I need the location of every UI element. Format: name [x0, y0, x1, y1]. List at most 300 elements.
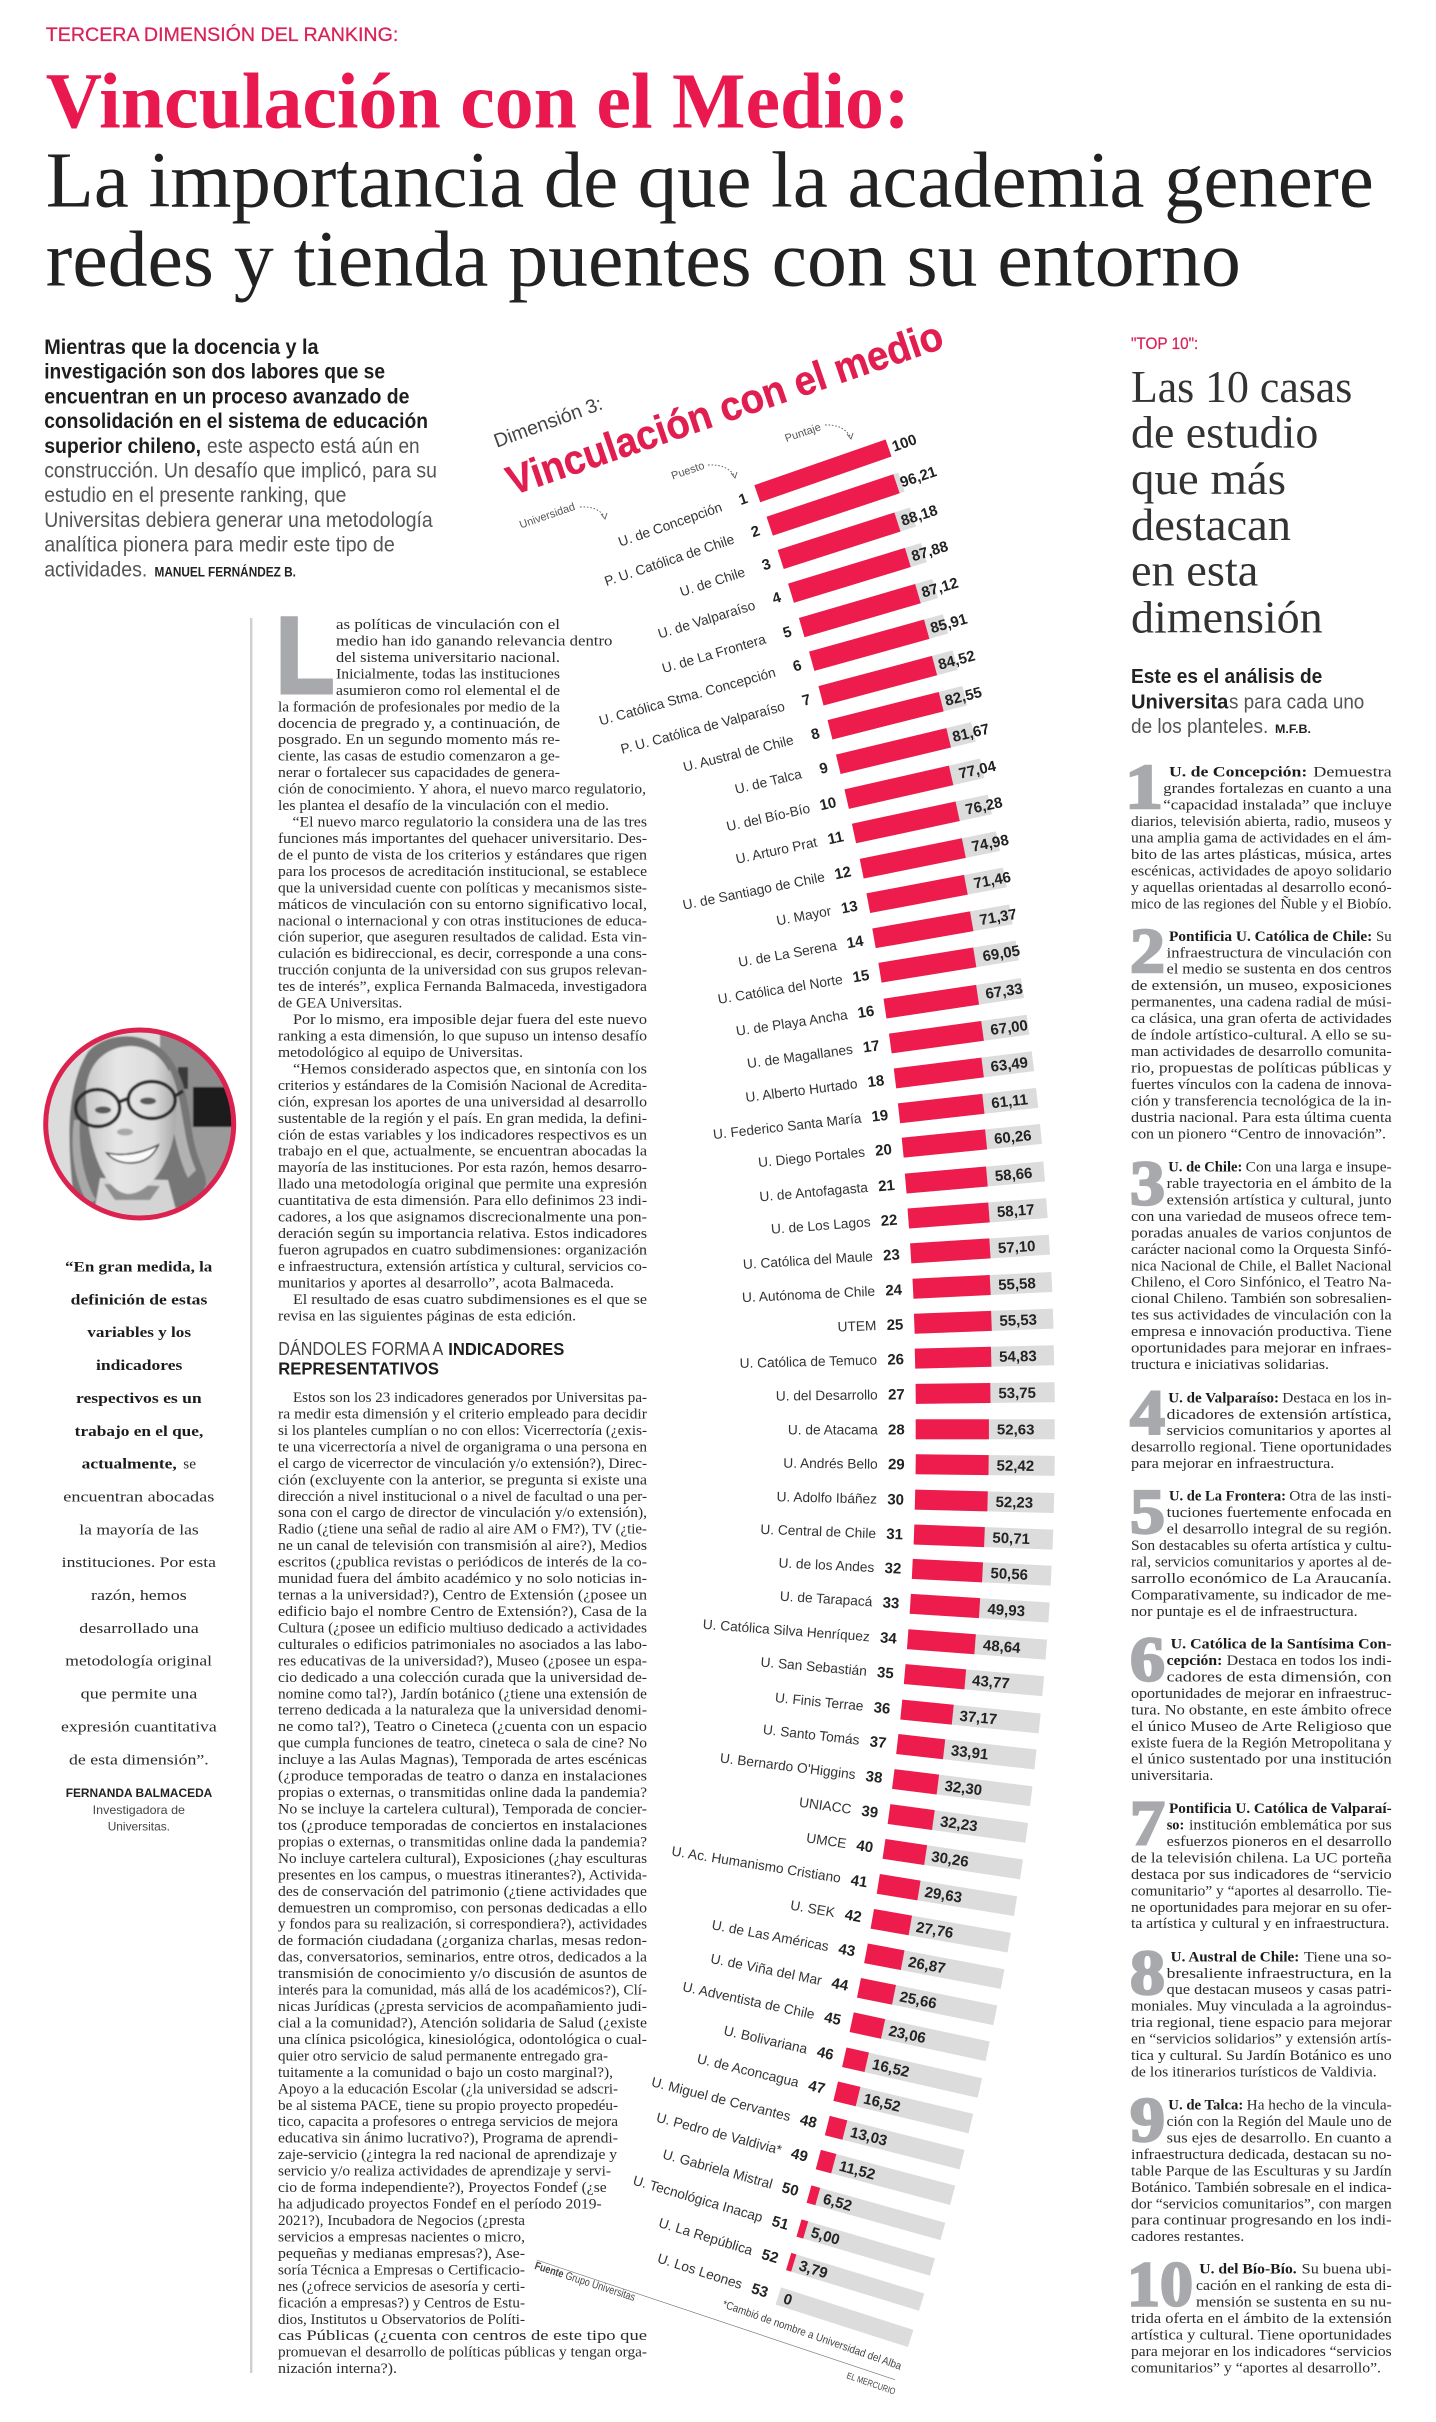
row 15: 69,05 [981, 942, 1021, 965]
row 33: U. de Tarapacá [779, 1589, 873, 1609]
top 10 item 2: ción y transferencia tecnológica de la in- [1131, 1093, 1392, 1109]
main article text, part 2: y fondos para su realización, si correspondiera?), actividades [278, 1917, 647, 1933]
quote attribution: Universitas. [108, 1820, 170, 1834]
main article text, part 2: No incluye cartelera cultural), Exposiciones (¿hay esculturas [278, 1851, 647, 1867]
top 10 item 9: cadores restantes. [1131, 2229, 1244, 2245]
row 40: 30,26 [930, 1848, 970, 1871]
row 10: 77,04 [957, 758, 998, 783]
row 26: U. Católica de Temuco [739, 1353, 878, 1371]
main article text, part 2: te una vicerrectoría a nivel de organigrama o una persona en [278, 1439, 648, 1455]
row 3: U. de Chile [678, 564, 747, 599]
row 51: U. Tecnológica Inacap [631, 2173, 765, 2225]
row 14: U. de La Serena [737, 938, 838, 970]
intro text block: investigación son dos labores que se [44, 361, 385, 384]
top 10 item 4: Destaca en los in- [1282, 1390, 1392, 1406]
top 10 item 8 [1130, 1937, 1392, 2080]
main article text, part 1: deración según su importancia relativa. Estos indicadores [278, 1226, 647, 1242]
row 53: U. Los Leones [656, 2251, 744, 2292]
top 10 item 9: U. de Talca: [1168, 2098, 1243, 2114]
subheading: indicadores representativos: INDICADORES [448, 1339, 564, 1359]
pull quote: variables y los [87, 1325, 191, 1341]
main article text, part 1: de el punto de vista de los criterios y estándares que rigen [278, 847, 648, 863]
top 10 item 6: el único sustentado por una institución [1131, 1752, 1392, 1768]
main article text, part 1: ción de conocimiento. Y ahora, el nuevo marco regulatorio, [278, 782, 646, 798]
main article text, part 2: ne como tal?), Teatro o Cineteca (¿cuenta con un espacio [278, 1719, 647, 1735]
top 10 item 6: el único Museo de Arte Religioso que [1131, 1719, 1392, 1735]
pull quote: metodología original [65, 1654, 212, 1670]
top 10 item 5: tuciones fuertemente enfocada en [1167, 1505, 1392, 1521]
row 20: U. Diego Portales [757, 1144, 866, 1170]
row 27 [776, 1382, 1055, 1406]
top 10 item 4: desarrollo regional. Tiene oportunidades [1131, 1440, 1392, 1456]
row 24 [742, 1272, 1052, 1307]
pull quote: que permite una [81, 1687, 198, 1703]
row 4: 87,88 [909, 538, 950, 565]
row 4 [655, 536, 951, 643]
row 12 [681, 829, 1010, 915]
heading: las 10 casas: que más [1131, 453, 1286, 504]
main article text, part 1: munitarios y aportes al desarrollo”, acota Balmaceda. [278, 1275, 614, 1291]
row 27: 27 [888, 1386, 905, 1404]
main article text, part 1: posgrado. En un segundo momento más re- [278, 732, 560, 748]
top 10 item 2: rio, propuestas de políticas públicas y [1131, 1060, 1392, 1076]
row 43: U. de Las Américas [711, 1917, 830, 1954]
top 10 item 5: nor puntaje es el de infraestructura. [1131, 1604, 1358, 1620]
top 10 item 3: empresa e innovación productiva. Tiene [1131, 1324, 1392, 1340]
top 10 item 2: dustria nacional. Para esta última cuenta [1131, 1110, 1392, 1126]
row 23: 23 [883, 1246, 900, 1264]
top 10 item 5 [1130, 1476, 1392, 1620]
row 5: 87,12 [920, 575, 960, 601]
main article text, part 1: criterios y estándares de la Comisión Nacional de Acredita- [278, 1078, 647, 1094]
top 10 item 6: cadores de esta dimensión, con [1167, 1669, 1392, 1685]
main article text, part 2: das, conversatorios, seminarios, entre otros, dedicados a la [278, 1950, 647, 1966]
main article text, part 1: que la universidad cuente con políticas y mecanismos siste- [278, 880, 647, 896]
row 50 [661, 2145, 945, 2240]
right column header [1131, 334, 1364, 738]
intro text block: encuentran en un proceso avanzado de [44, 385, 409, 408]
heading: las 10 casas: dimensión [1131, 591, 1323, 642]
top 10 item 3: tructura e iniciativas solidarias. [1131, 1357, 1329, 1373]
intro text block [44, 336, 437, 581]
row 18: 63,49 [990, 1054, 1029, 1076]
top 10 item 3: U. de Chile: [1168, 1160, 1242, 1176]
main article text, part 2: tuitamente a la comunidad o bajo un costo marginal?), [278, 2065, 613, 2081]
intro text block: estudio en el presente ranking, que [44, 484, 346, 507]
top 10 item 4: U. de Valparaíso: [1168, 1390, 1279, 1406]
row 26: 26 [887, 1351, 904, 1369]
numeral 9: 9 [1130, 2084, 1165, 2155]
main article text, part 2: si los planteles cumplían o no con ellos: Vicerrectoría (¿exis- [278, 1423, 647, 1439]
row 39: UNIACC [798, 1795, 852, 1817]
row 18: U. Alberto Hurtado [745, 1076, 859, 1105]
row 9: 9 [818, 759, 830, 778]
main article text, part 2: cio dedicado a una colección curada que la universidad de- [278, 1670, 647, 1686]
row 43: 26,87 [907, 1954, 947, 1977]
top 10 item 2: Su [1376, 929, 1392, 945]
row 20 [757, 1124, 1042, 1172]
main article text, part 2: cio de forma independiente?), Proyectos Fondef (¿se [278, 2180, 607, 2196]
top 10 item 8: en “servicios solidarios” y extensión artís- [1131, 2032, 1392, 2048]
main article text, part 2: quier otro servicio de salud permanente entregado gra- [278, 2048, 608, 2064]
row 52: 3,79 [797, 2257, 830, 2282]
subheading: indicadores representativos: REPRESENTATIVOS [278, 1358, 439, 1378]
row 14 [737, 904, 1018, 972]
row 41: 29,63 [923, 1884, 963, 1907]
heading: las 10 casas: en esta [1131, 545, 1258, 596]
row 29 [783, 1453, 1055, 1476]
main article text, part 1: la formación de profesionales por medio de la [278, 699, 560, 715]
row 22 [770, 1198, 1048, 1239]
top 10 item 5: ral, servicios comunitarios y aportes al de- [1131, 1555, 1392, 1571]
row 37: 33,91 [950, 1742, 989, 1763]
row 24: U. Autónoma de Chile [742, 1284, 875, 1305]
top 10 item 10: Su buena ubi- [1302, 2262, 1392, 2278]
row 16 [735, 978, 1024, 1041]
row 47: 16,52 [862, 2090, 902, 2116]
main article text, part 1: ción de estas variables y los indicadores respectivos es un [278, 1127, 648, 1143]
drop cap L: L [276, 595, 334, 716]
main article text, part 2: pequeñas y medianas empresas?), Ase- [278, 2246, 525, 2262]
top 10 item 2: man actividades de desarrollo comunita- [1131, 1044, 1392, 1060]
top 10 item 6: cepción: [1167, 1653, 1222, 1669]
main article text, part 1 [278, 617, 648, 1324]
row 25: UTEM [837, 1318, 877, 1335]
main article text, part 2: soría Técnica a Empresas o Certificacio- [278, 2262, 525, 2278]
main article text, part 2: escritos (¿publica revistas o periódicos de interés de la co- [278, 1555, 647, 1571]
row 31: U. Central de Chile [760, 1522, 876, 1541]
main article text, part 1: as políticas de vinculación con el [336, 617, 560, 633]
main article text, part 2: dios, Institutos u Observatorios de Políti- [278, 2312, 525, 2328]
row 3 [677, 500, 940, 601]
numeral 3: 3 [1130, 1148, 1165, 1218]
row 3: 3 [760, 556, 773, 574]
row 46: U. Bolivariana [722, 2023, 809, 2057]
main article text, part 2: dirección a nivel institucional o a nivel de facultad o una per- [278, 1489, 647, 1505]
row 52 [657, 2213, 924, 2311]
row 13: 13 [840, 898, 859, 917]
top 10 item 2: ca clásica, una gran oferta de actividades [1131, 1011, 1392, 1027]
row 52: 52 [760, 2246, 780, 2267]
top 10 item 4: dicadores de extensión artística, [1167, 1407, 1392, 1423]
top 10 item 8: tria regional, tiene espacio para mejorar [1131, 2015, 1392, 2031]
row 34: 48,64 [982, 1637, 1022, 1657]
top 10 item 10: para mejorar en los indicadores “servicios [1131, 2344, 1392, 2360]
main article text, part 1: culación es bidireccional, es decir, corresponde a una cons- [278, 946, 647, 962]
main article text, part 1: tes de interés”, explica Fernanda Balmaceda, investigadora [278, 979, 647, 995]
row 50: 6,52 [821, 2191, 854, 2215]
pull quote: encuentran abocadas [63, 1490, 214, 1506]
top 10 item 9: ción con la Región del Maule uno de [1167, 2114, 1392, 2130]
row 49: U. Pedro de Valdivia* [655, 2110, 784, 2158]
row 17 [746, 1015, 1029, 1073]
top 10 item 1: una amplia gama de actividades en el ám- [1131, 831, 1392, 847]
row 15: 15 [851, 967, 871, 986]
row 33: 49,93 [987, 1601, 1026, 1620]
row 44 [709, 1948, 997, 2025]
row 37: U. Santo Tomás [762, 1722, 860, 1748]
row 1: 100 [890, 431, 919, 455]
main article text, part 1: El resultado de esas cuatro subdimensiones es el que se [293, 1292, 647, 1308]
row 31 [760, 1519, 1053, 1550]
row 51: 5,00 [809, 2224, 842, 2249]
row 38: 38 [865, 1768, 883, 1787]
top 10 item 2: Pontificia U. Católica de Chile: [1169, 929, 1372, 945]
main article text, part 1: “El nuevo marco regulatorio la considera una de las tres [292, 814, 647, 830]
row 36: 37,17 [959, 1708, 998, 1728]
top 10 item 6: tura. No obstante, en este ámbito ofrece [1131, 1702, 1392, 1718]
main article text, part 2: zaje-servicio (¿integra la red nacional de aprendizaje y [278, 2147, 618, 2163]
main article text, part 2: educativa sin ánimo lucrativo?), Programa de aprendi- [278, 2131, 618, 2147]
row 19: U. Federico Santa María [712, 1111, 863, 1142]
quote attribution: FERNANDA BALMACEDA [66, 1786, 213, 1800]
row 5: 5 [781, 623, 794, 642]
row 30: 30 [887, 1491, 904, 1509]
top 10 item 7: esfuerzos pioneros en el desarrollo [1167, 1834, 1392, 1850]
quote attribution [66, 1786, 213, 1834]
main article text, part 1: nacional o internacional y con otras instituciones de educa- [278, 913, 647, 929]
main article text, part 2: ra medir esta dimensión y el criterio empleado para decidir [278, 1406, 647, 1422]
row 21: 21 [877, 1177, 896, 1195]
top 10 item 4 [1130, 1376, 1392, 1472]
row 34 [702, 1614, 1047, 1660]
top 10 item 9: Ha hecho de la vincula- [1247, 2098, 1392, 2114]
row 27: 53,75 [998, 1385, 1036, 1402]
row 48: 48 [798, 2111, 819, 2132]
top 10 item 3: tes sus actividades de vinculación con la [1131, 1308, 1392, 1324]
pull quote [61, 1260, 217, 1834]
top 10 item 5: Son destacables su oferta artística y cultu- [1131, 1538, 1392, 1554]
row 9 [733, 718, 991, 799]
intro text block: Mientras que la docencia y la [44, 336, 319, 359]
row 23 [742, 1235, 1050, 1274]
row 13: U. Mayor [775, 903, 833, 928]
main article text, part 2: demuestren un compromiso, con personas dedicadas a ello [278, 1900, 647, 1916]
top 10 item 3: nica Nacional de Chile, el Ballet Nacional [1131, 1258, 1392, 1274]
row 7: 7 [800, 691, 813, 710]
row 51 [631, 2171, 935, 2276]
row 10 [724, 755, 998, 836]
row 50: 50 [780, 2179, 800, 2200]
row 16: 16 [856, 1003, 875, 1022]
main article text, part 1: “Hemos considerado aspectos que, en sintonía con los [293, 1061, 647, 1077]
quote attribution: Investigadora de [93, 1803, 185, 1817]
top 10 item 6: U. Católica de la Santísima Con- [1171, 1636, 1392, 1652]
main article text, part 2: tico, capacita a profesores o entrega servicios de mejora [278, 2114, 618, 2130]
top 10 item 6: oportunidades de mejorar en infraestruc- [1131, 1686, 1392, 1702]
ranking chart [491, 312, 1055, 2396]
row 20: 60,26 [993, 1127, 1032, 1148]
row 45: U. Adventista de Chile [681, 1979, 816, 2022]
row 29: U. Andrés Bello [783, 1456, 878, 1472]
top 10 item 6: universitaria. [1131, 1768, 1213, 1784]
row 47 [695, 2048, 973, 2133]
top 10 item 7: ne oportunidades para mejorar en su ofer- [1131, 1900, 1392, 1916]
pull quote: definición de estas [71, 1292, 207, 1308]
row 6: 6 [791, 657, 804, 675]
top 10 item 9: table Parque de las Esculturas y su Jardín [1131, 2163, 1392, 2179]
top 10 item 8: U. Austral de Chile: [1171, 1949, 1299, 1965]
pull quote: trabajo en el que, [75, 1424, 204, 1440]
main article text, part 2: tos (¿produce temporadas de conciertos en instalaciones [278, 1818, 647, 1834]
row 10: 10 [818, 794, 838, 814]
intro text block: construcción. Un desafío que implicó, para su [44, 460, 437, 482]
intro text block: este aspecto está aún en [207, 435, 420, 458]
top 10 item 9: Botánico. También sobresale en el indica- [1131, 2180, 1392, 2196]
row 44: U. de Viña del Mar [709, 1951, 824, 1988]
row 32: 32 [884, 1560, 902, 1578]
top 10 item 10: mensión se sustenta en su nu- [1196, 2295, 1392, 2311]
row 24: 55,58 [998, 1275, 1036, 1294]
pull quote: respectivos es un [76, 1391, 202, 1407]
top 10 item 8: bresaliente infraestructura, en la [1167, 1966, 1392, 1982]
main article text, part 2: nicas Jurídicas (¿presta servicios de acompañamiento judi- [278, 1999, 647, 2015]
row 21: U. de Antofagasta [759, 1180, 869, 1204]
row 39 [798, 1792, 1028, 1843]
row 49: 49 [789, 2145, 810, 2166]
top 10 item 2: fuertes vínculos con la cadena de innova- [1131, 1077, 1392, 1093]
main article text, part 2: ha adjudicado proyectos Fondef en el período 2019- [278, 2196, 602, 2212]
main article text, part 2: presentes en los campus, o muestras itinerantes?), Activida- [278, 1867, 647, 1883]
top 10 item 3: extensión artística y cultural, junto [1167, 1192, 1392, 1208]
heading: las 10 casas [1131, 361, 1352, 642]
main article text, part 2: nes (¿ofrece servicios de asesoría y certi- [278, 2279, 525, 2295]
main article text, part 2: Radio (¿tiene una señal de radio al aire AM o FM?), TV (¿tie- [278, 1522, 647, 1538]
row 40: UMCE [805, 1830, 847, 1851]
row 6: U. Católica Stma. Concepción [597, 665, 777, 728]
row 15 [716, 940, 1021, 1009]
top 10 item 10 [1127, 2249, 1392, 2376]
row 28 [788, 1419, 1055, 1439]
subheading: indicadores representativos [278, 1339, 564, 1378]
row 11 [734, 792, 1004, 869]
row 47: U. de Aconcagua [695, 2051, 801, 2090]
row 42 [789, 1895, 1011, 1953]
row 44: 44 [830, 1975, 850, 1995]
top 10 item 7: institución emblemática por sus [1189, 1818, 1392, 1834]
row 30: U. Adolfo Ibáñez [776, 1489, 877, 1507]
top 10 item 4: servicios comunitarios y aportes al [1167, 1423, 1392, 1439]
row 8: 8 [809, 725, 822, 744]
top 10 item 1: grandes fortalezas en cuanto a una [1163, 781, 1392, 797]
row 22: 58,17 [996, 1201, 1035, 1221]
row 30: 52,23 [995, 1494, 1033, 1512]
top 10 item 9: sus ejes de desarrollo. En cuanto a [1167, 2130, 1392, 2146]
numeral 7: 7 [1130, 1788, 1165, 1859]
top 10 item 1: “capacidad instalada” que incluye [1163, 798, 1392, 814]
title line: red: Vinculación con el Medio: [46, 58, 910, 145]
row 22: U. de Los Lagos [770, 1214, 871, 1237]
top 10 item 10: comunitarios” y “aportes al desarrollo”. [1131, 2360, 1381, 2376]
pull quote: razón, hemos [91, 1588, 187, 1604]
top 10 item 3 [1130, 1148, 1392, 1373]
row 17: 67,00 [989, 1017, 1029, 1039]
main article text, part 1: ciente, las casas de estudio comenzaron a ge- [278, 749, 560, 765]
row 4: U. de Valparaíso [656, 598, 757, 641]
row 19: 61,11 [990, 1091, 1029, 1112]
chart title: Dimensión 3: Dimensión 3: [491, 393, 606, 452]
row 14: 71,37 [978, 906, 1018, 929]
row 24: 24 [885, 1282, 903, 1299]
main article text, part 2: una clínica psicológica, kinesiológica, odontológica o cual- [278, 2032, 647, 2048]
row 2: P. U. Católica de Chile [603, 532, 736, 589]
row 19: 19 [871, 1107, 889, 1126]
legend: Puesto [670, 460, 737, 482]
row 38: 32,30 [944, 1778, 983, 1799]
intro text block: MANUEL FERNÁNDEZ B. [154, 563, 296, 579]
numeral 8: 8 [1130, 1937, 1165, 2008]
row 45 [681, 1976, 990, 2061]
right column intro: de los planteles. [1131, 716, 1268, 738]
top 10 item 8: tica y cultural. Su Jardín Botánico es uno [1131, 2048, 1392, 2064]
top 10 item 7: comunitario” y “aportes al desarrollo. Tie- [1131, 1883, 1392, 1899]
row 2 [602, 461, 939, 591]
main article text, part 2: ficación a empresas?) y Centros de Estu- [278, 2295, 525, 2311]
main article text, part 2: res educativas de la universidad?), Museo (¿posee un espa- [278, 1653, 647, 1669]
main article text, part 1: trabajo en el que, actualmente, se encuentran abocadas la [278, 1144, 647, 1160]
top 10 item 8: de los itinerarios turísticos de Valdivia. [1131, 2064, 1377, 2080]
main article text, part 1: sustentable de la región y el país. En gran medida, la defini- [278, 1111, 647, 1127]
pull quote: instituciones. Por esta [62, 1555, 216, 1571]
main article text, part 2: incluye a las Aulas Magnas), Temporada de artes escénicas [278, 1752, 647, 1768]
row 41: 41 [849, 1872, 869, 1891]
main article text, part 2: propias o externas, o transmitidas online dada la pandemia? [278, 1785, 647, 1801]
row 49 [654, 2107, 955, 2205]
top 10 item 9: infraestructura dedicada, destacan su no- [1131, 2147, 1392, 2163]
main article text, part 2: interés para la comunidad, más allá de los académicos?), Clí- [278, 1983, 647, 1999]
row 12: 12 [833, 863, 853, 883]
main article text, part 1: docencia de pregrado y, a continuación, de [278, 716, 560, 732]
heading: las 10 casas: de estudio [1131, 407, 1318, 458]
top 10 item 2: el medio se sustenta en dos centros [1167, 962, 1392, 978]
main article text, part 2: No se incluye la cartelera cultural), Temporada de concier- [278, 1802, 647, 1818]
row 37 [762, 1719, 1037, 1769]
row 2: 2 [749, 522, 762, 541]
row 34: U. Católica Silva Henríquez [702, 1617, 870, 1644]
row 12: 74,98 [970, 832, 1010, 856]
row 48: U. Miguel de Cervantes [650, 2074, 792, 2124]
source note: Fuente Grupo Universitas [533, 2260, 637, 2304]
main article text, part 2: de formación ciudadana (¿organiza charlas, mesas redon- [278, 1933, 647, 1949]
main article text, part 1: mayoría de las instituciones. Por esta razón, hemos desarro- [278, 1160, 647, 1176]
row 33 [779, 1586, 1050, 1623]
row 38: U. Bernardo O'Higgins [719, 1750, 857, 1782]
main article text, part 1: máticos de vinculación con su entorno significativo local, [278, 897, 647, 913]
intro text block: Universitas debiera generar una metodología [44, 509, 433, 532]
credit: EL MERCURIO [845, 2370, 897, 2396]
row 39: 32,23 [939, 1813, 979, 1835]
top 10 item 8: que destacan museos y casas patri- [1167, 1982, 1392, 1998]
row 20: 20 [874, 1141, 893, 1160]
row 48: 13,03 [848, 2124, 889, 2150]
top 10 item 5: Comparativamente, su indicador de me- [1131, 1588, 1392, 1604]
main article text, part 2: edificio bajo el nombre Centro de Extensión?), Casa de la [278, 1604, 647, 1620]
row 17: 17 [862, 1037, 881, 1056]
top 10 item 9: para continuar progresando en los indi- [1131, 2213, 1392, 2229]
subtitle line 2: redes y tienda puentes con su entorno [46, 217, 1241, 304]
top 10 item 1: Demuestra [1313, 765, 1392, 781]
main article text, part 1: cuantitativa de esta dimensión. Para ello definimos 23 indi- [278, 1193, 647, 1209]
top 10 item 10: U. del Bío-Bío. [1199, 2262, 1297, 2278]
main article text, part 1: trucción conjunta de la universidad con sus grupos relevan- [278, 963, 647, 979]
main article text, part 1: ranking a esta dimensión, lo que supuso un intenso desafío [278, 1028, 647, 1044]
top 10 item 3: cional Chileno. También son sobresalien- [1131, 1291, 1392, 1307]
row 26 [739, 1345, 1054, 1373]
main article text, part 2: Cultura (¿posee un edificio multiuso dedicado a actividades [278, 1620, 647, 1636]
main article text, part 2: ternas a la universidad?), Centro de Extensión (¿posee un [278, 1588, 648, 1604]
row 2: 96,21 [898, 463, 939, 491]
right column intro: M.F.B. [1275, 722, 1311, 736]
